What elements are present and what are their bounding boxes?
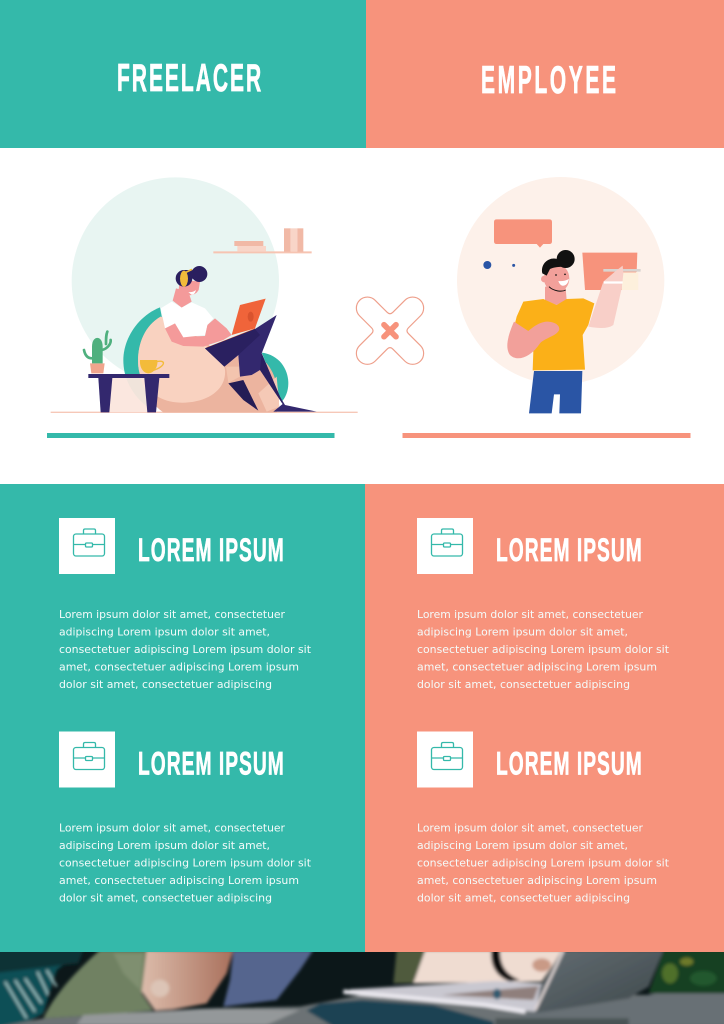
text block (59, 608, 312, 691)
text block: adipiscing Lorem ipsum dolor sit amet, (417, 839, 628, 852)
text block: amet, consectetuer adipiscing Lorem ipsum (59, 874, 299, 887)
text block: consectetuer adipiscing Lorem ipsum dolor sit (417, 856, 670, 870)
bar: employee underline (402, 433, 690, 438)
panel: freelancer header (0, 0, 366, 148)
icon: briefcase (59, 732, 115, 788)
text block: amet, consectetuer adipiscing Lorem ipsum (417, 874, 657, 887)
illustration: employee with tablet (457, 177, 664, 413)
item: employee block one (417, 518, 670, 691)
figure on beanbag (123, 266, 317, 412)
text block: consectetuer adipiscing Lorem ipsum dolor sit (417, 643, 670, 656)
text block: consectetuer adipiscing Lorem ipsum dolor sit (59, 643, 312, 656)
icon: briefcase (417, 732, 473, 788)
item: freelancer block two (59, 732, 312, 904)
text block: adipiscing Lorem ipsum dolor sit amet, (59, 626, 270, 638)
text block: dolor sit amet, consectetuer adipiscing (417, 678, 630, 691)
illustration: freelancer on beanbag (51, 177, 358, 413)
icon: briefcase (417, 518, 473, 574)
icon: briefcase (59, 518, 115, 574)
side table and cactus (84, 332, 169, 412)
text block: amet, consectetuer adipiscing Lorem ipsum (59, 660, 299, 674)
text block: Lorem ipsum dolor sit amet, consectetuer (417, 822, 643, 834)
background circle, speech bubble and dots (457, 177, 664, 384)
title: employee: EMPLOYEE (481, 58, 616, 102)
text block: adipiscing Lorem ipsum dolor sit amet, (417, 626, 628, 638)
text block: Lorem ipsum dolor sit amet, consectetuer (59, 822, 285, 834)
heading: LOREM IPSUM (138, 532, 284, 568)
heading: LOREM IPSUM (138, 745, 284, 782)
panel: employee header (366, 0, 724, 148)
icon: versus cross (329, 270, 451, 392)
photo strip: person working at laptop (0, 950, 724, 1024)
text block (417, 608, 670, 691)
man figure (507, 250, 641, 413)
text block: Lorem ipsum dolor sit amet, consectetuer (417, 608, 643, 621)
background circle and shelf (51, 177, 358, 413)
text block (417, 822, 670, 904)
text block: adipiscing Lorem ipsum dolor sit amet, (59, 839, 270, 852)
item: freelancer block one (59, 518, 312, 691)
text block: dolor sit amet, consectetuer adipiscing (59, 678, 272, 691)
panel: freelancer details (0, 484, 365, 952)
item: employee block two (417, 732, 670, 904)
heading: LOREM IPSUM (496, 745, 642, 782)
bar: freelancer underline (47, 433, 334, 438)
text block (59, 822, 312, 904)
heading: LOREM IPSUM (496, 532, 642, 568)
text block: dolor sit amet, consectetuer adipiscing (59, 892, 272, 904)
title: freelancer: FREELACER (117, 56, 261, 100)
text block: consectetuer adipiscing Lorem ipsum dolor sit (59, 856, 312, 870)
text block: Lorem ipsum dolor sit amet, consectetuer (59, 608, 285, 621)
text block: dolor sit amet, consectetuer adipiscing (417, 892, 630, 904)
text block: amet, consectetuer adipiscing Lorem ipsum (417, 660, 657, 674)
panel: employee details (365, 484, 724, 952)
